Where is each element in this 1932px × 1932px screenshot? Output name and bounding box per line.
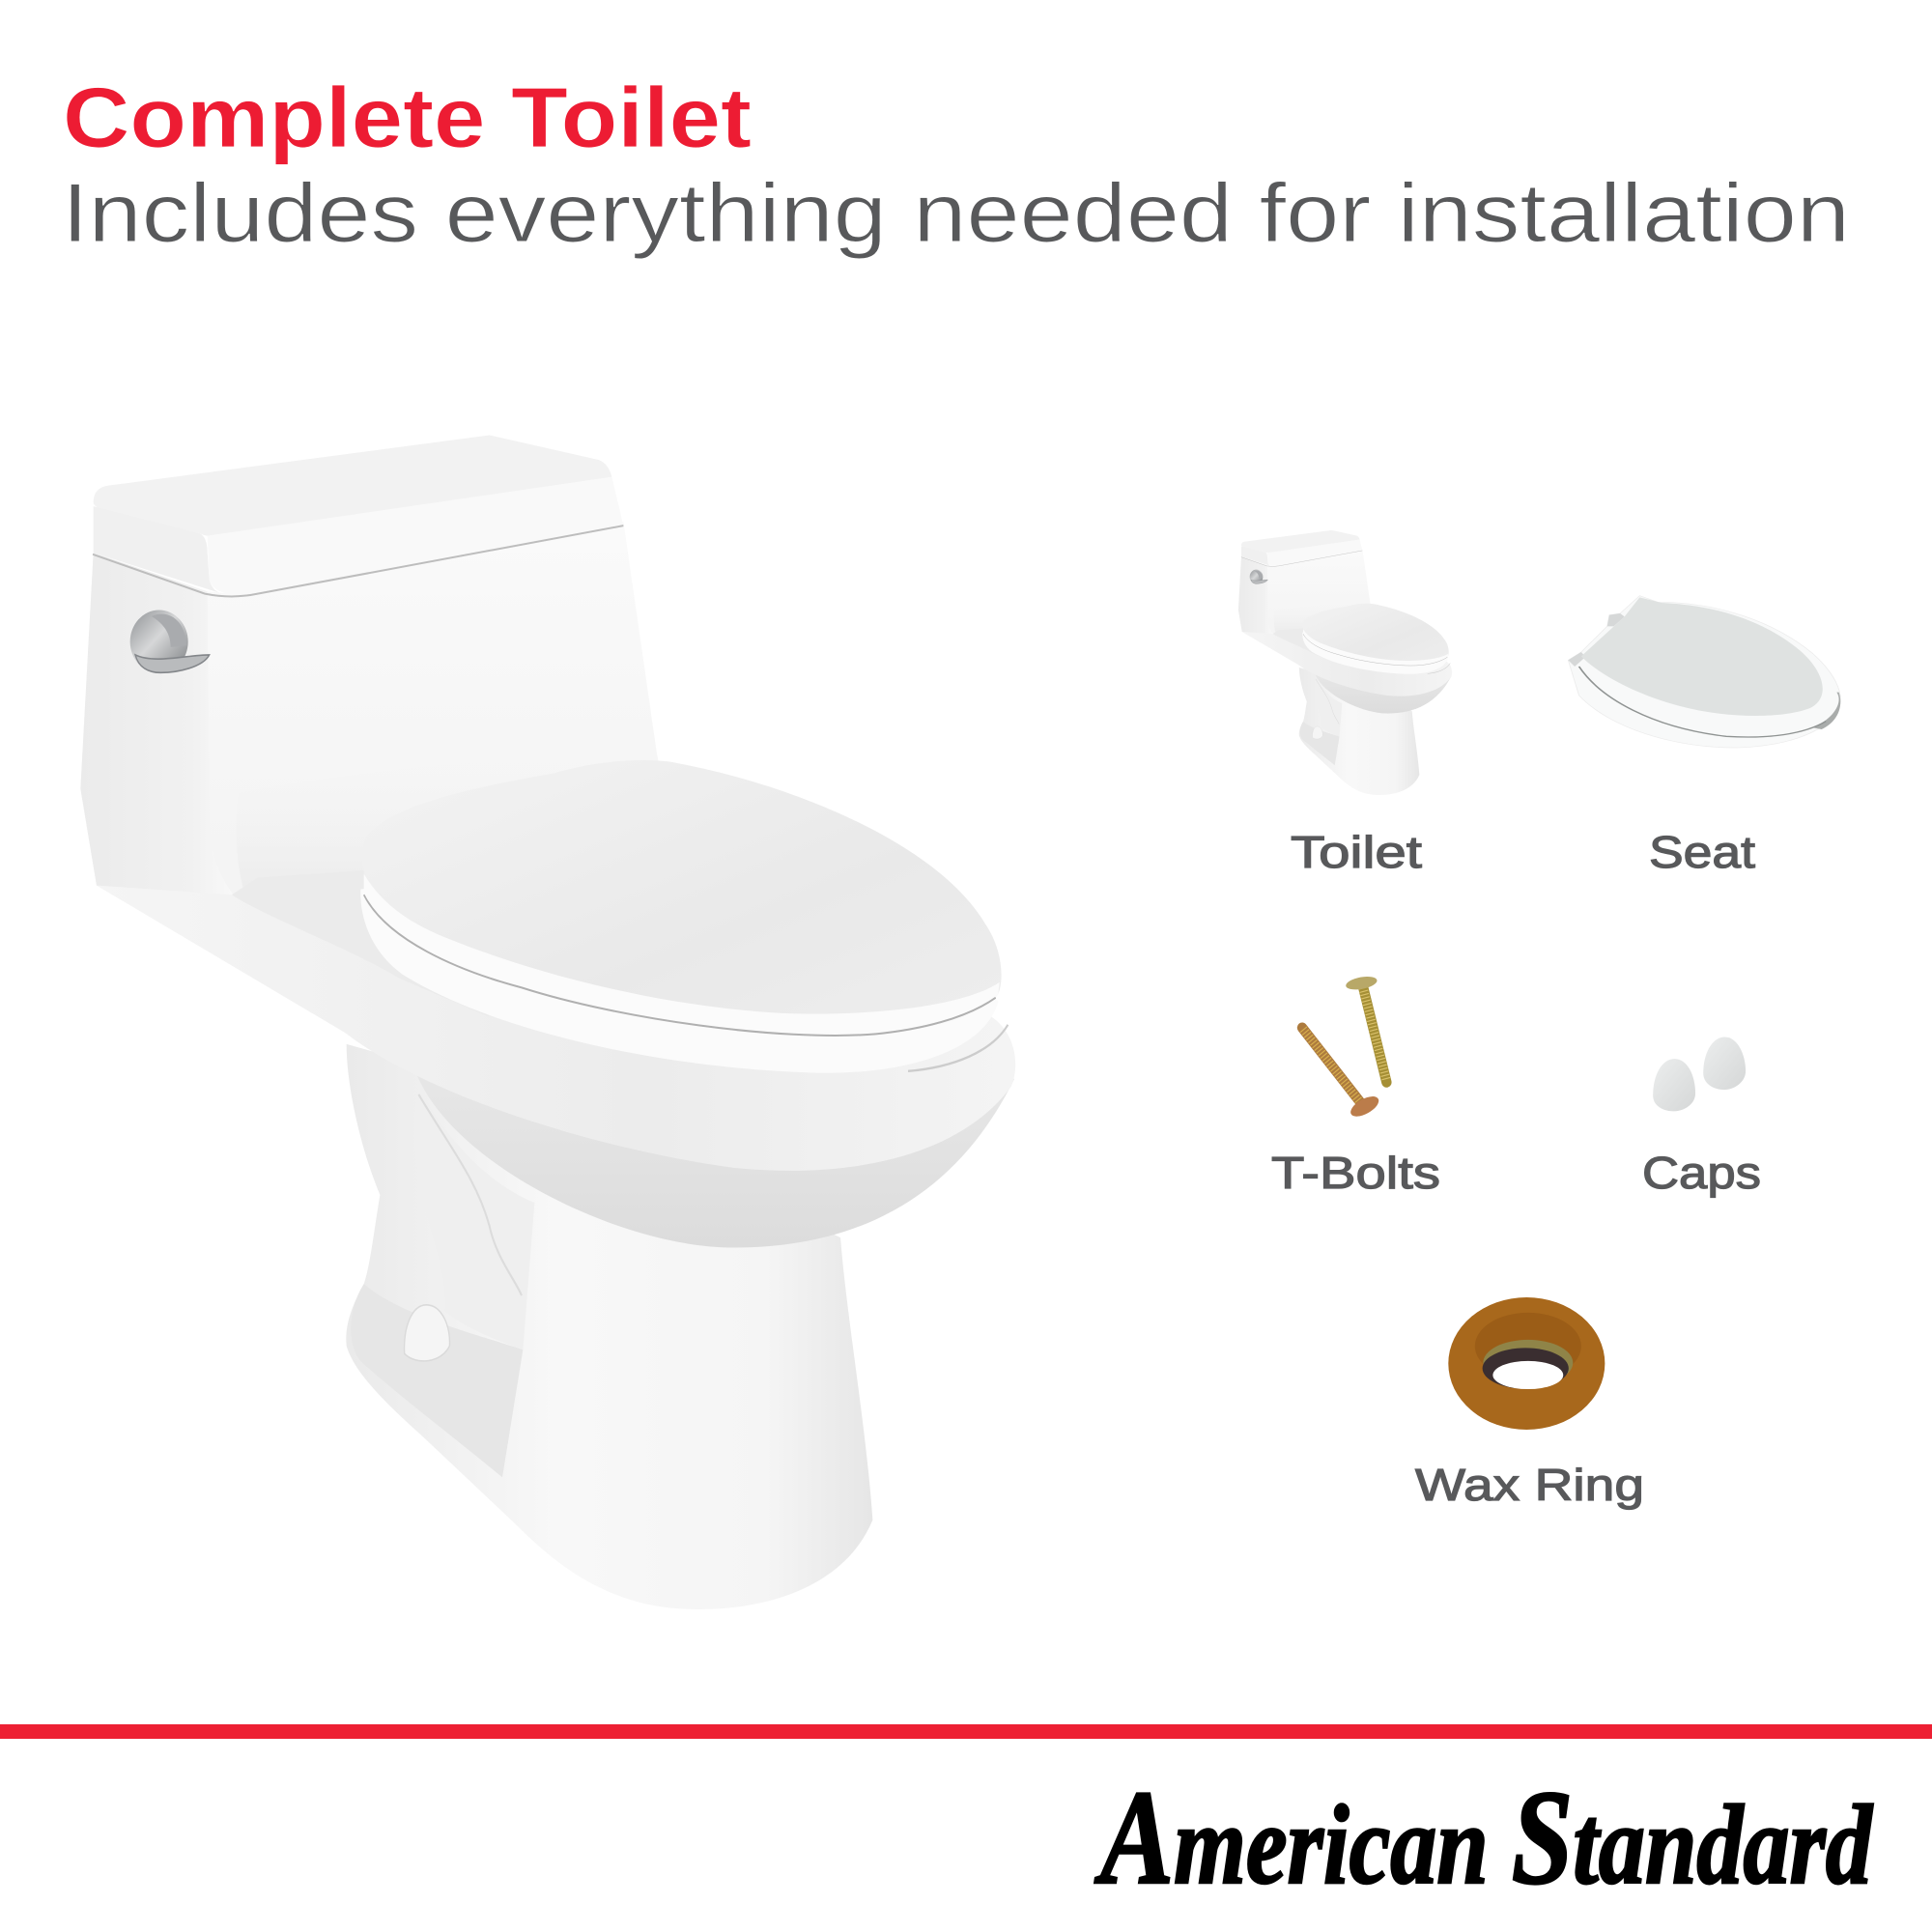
cap right [1703, 1037, 1746, 1090]
deck and rim [97, 870, 1015, 1171]
bolt two shaft [1302, 1028, 1362, 1104]
label: Toilet: Toilet [1291, 827, 1422, 877]
icon: caps [1653, 1037, 1746, 1111]
ring dark flange [1483, 1348, 1569, 1389]
seat hinge left [1568, 652, 1585, 667]
lever handle [135, 655, 210, 672]
seat lid [362, 760, 1002, 1036]
bowl underside [415, 1009, 1014, 1248]
icon: t-bolts [1302, 975, 1386, 1121]
thumbnail: seat [1568, 596, 1840, 748]
icon: wax ring [1448, 1297, 1605, 1430]
tank recess shade [237, 753, 683, 894]
seat ring [360, 870, 998, 1073]
tank body [80, 522, 683, 1033]
seat bottom line [1579, 667, 1826, 737]
cap left [1653, 1059, 1695, 1111]
parts: bolts, caps, wax ring [1302, 975, 1746, 1430]
flush lever [130, 610, 210, 673]
bolt two head [1348, 1093, 1381, 1121]
bolt two threads [1303, 1029, 1360, 1103]
label: Caps: Caps [1642, 1148, 1761, 1198]
ring body [1448, 1297, 1605, 1430]
seat gap line [364, 895, 996, 1036]
recess side [414, 1087, 534, 1350]
ring hole [1492, 1361, 1563, 1389]
red divider bar [0, 1724, 1932, 1739]
subtitle: Includes everything needed for installation [62, 167, 1850, 260]
toilet pedestal [346, 1044, 872, 1609]
ring well [1475, 1313, 1581, 1379]
seat lid edge highlight [364, 874, 1000, 1036]
label: Wax Ring: Wax Ring [1415, 1460, 1644, 1510]
label: T-Bolts: T-Bolts [1271, 1148, 1440, 1198]
label: Seat: Seat [1649, 827, 1755, 877]
bolt one shaft [1362, 983, 1386, 1082]
title: Complete Toilet: Complete Toilet [63, 70, 752, 165]
foot recess [351, 1284, 523, 1477]
seat hinge upper [1607, 613, 1625, 626]
ring inner seal [1483, 1340, 1573, 1386]
lever highlight [152, 614, 186, 647]
tank lid top [94, 435, 611, 536]
deck top surface [232, 870, 490, 1017]
seat lid surface [1581, 597, 1823, 716]
thumbnail: toilet [1238, 530, 1452, 795]
seat outer body [1568, 596, 1840, 748]
main toilet image [80, 435, 1015, 1609]
trapway edge line [418, 1094, 522, 1295]
bolt one head [1345, 975, 1378, 992]
rim lip line [908, 1025, 1008, 1071]
bolt one threads [1363, 987, 1386, 1081]
tank side panel [80, 553, 239, 901]
tank lid seam [93, 526, 623, 596]
tank lid front [208, 477, 623, 595]
lever plate [130, 610, 188, 673]
tank lid left [94, 506, 222, 594]
bolt cap on foot [405, 1305, 449, 1361]
seat right shade [1813, 693, 1840, 729]
logo: American Standard: American Standard [1094, 1763, 1874, 1913]
